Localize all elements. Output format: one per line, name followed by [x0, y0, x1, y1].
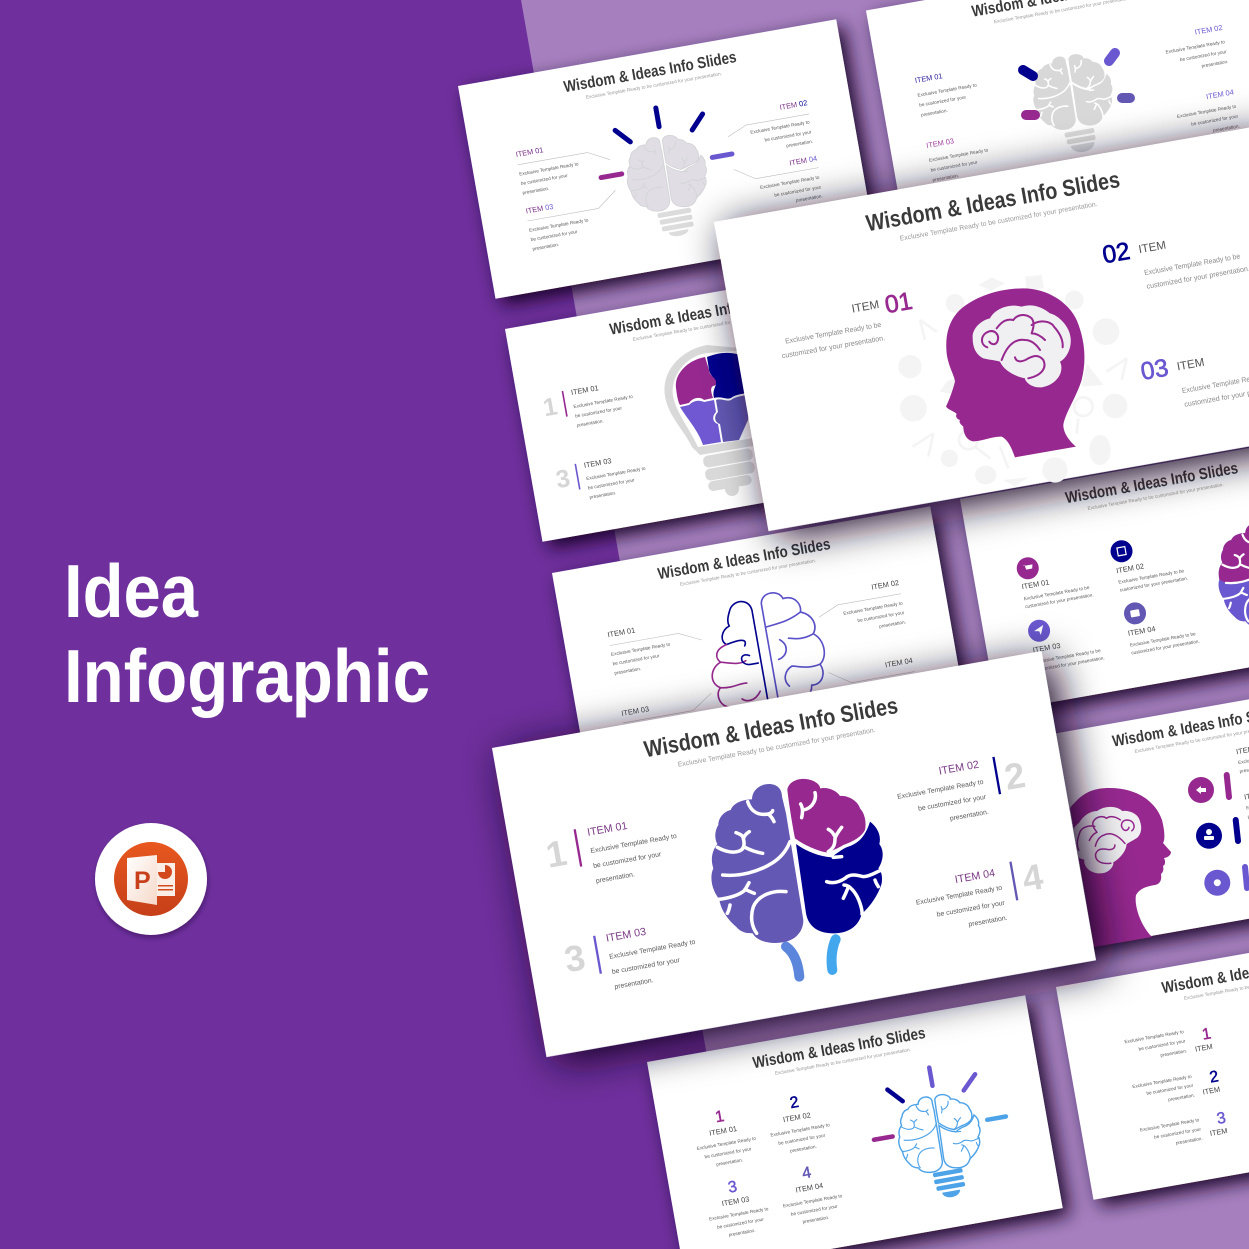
panel: blue bulb slide: presentation.	[728, 1228, 756, 1237]
panel: head with icon list slide	[1007, 675, 1249, 955]
panel: large head slide: Wisdom & Ideas Info Slides	[864, 166, 1122, 236]
panel: blue bulb slide: be customized for your	[778, 1133, 826, 1146]
panel: icon list slide: customized for your presentation.	[1036, 655, 1105, 672]
panel: gray brain slide with rays: Wisdom & Ideas Info Slides	[562, 49, 738, 96]
panel: gray brain slide with rays: ITEM 04	[789, 154, 818, 168]
icon: PowerPoint badge	[95, 823, 207, 935]
panel: numbered right slide: presentation.	[1175, 1136, 1203, 1146]
panel: gray brain slide with rays	[458, 19, 874, 299]
panel: large colour brain slide: Exclusive Template Ready to	[590, 833, 677, 855]
icon: four colour brain	[711, 779, 883, 977]
panel: blue bulb slide: be customized for your	[790, 1204, 838, 1217]
icon: puzzle light bulb	[664, 345, 772, 496]
icon: head silhouette facing right	[1062, 788, 1171, 947]
panel: outline brain slide	[552, 506, 968, 786]
panel: icon list slide: customized for your presentation.	[1131, 639, 1200, 656]
panel: puzzle bulb slide: 1	[541, 392, 560, 422]
panel: blue bulb slide: Exclusive Template Ready to	[709, 1206, 769, 1222]
panel: gray brain slide with rays: Exclusive Template Ready to	[750, 119, 810, 135]
panel: large colour brain slide: presentation.	[614, 977, 654, 991]
panel: puzzle bulb slide: be customized for your	[575, 405, 623, 419]
panel: icon list slide: Exclusive Template Ready to be	[1023, 585, 1090, 601]
panel: puzzle bulb slide: Exclusive Template Ready to	[573, 394, 634, 409]
panel: large colour brain slide: 1	[543, 832, 570, 876]
panel: large colour brain slide: Wisdom & Ideas Info Slides	[642, 692, 900, 762]
panel: numbered right slide: Exclusive Template Ready to	[1132, 1074, 1192, 1089]
panel: gray brain slide with rays: Exclusive Template Ready to	[519, 161, 579, 177]
panel: gray brain slide with stub bars: Exclusive Template Ready to	[1165, 39, 1226, 55]
panel: icon list slide: Exclusive Template Ready to be	[1118, 568, 1185, 585]
panel: gray brain slide with stub bars: be customized for your	[930, 159, 978, 173]
panel: gray brain slide with rays: Exclusive Template Ready to	[760, 175, 820, 190]
panel: outline brain slide: ITEM 01	[607, 626, 636, 639]
panel: outline brain slide: presentation.	[879, 619, 906, 629]
panel: outline brain slide: Wisdom & Ideas Info Slides	[656, 536, 832, 583]
panel: large colour brain slide: presentation.	[949, 809, 989, 823]
panel: icon list slide: Exclusive Template Ready to be	[1130, 631, 1196, 648]
panel: gray brain slide with stub bars: ITEM 03	[926, 136, 955, 150]
panel: icon list slide: ITEM 02	[1116, 562, 1145, 575]
panel: large colour brain slide: ITEM 04	[954, 867, 996, 886]
panel: gray brain slide with rays: be customized for your	[764, 129, 812, 143]
panel: numbered right slide: presentation.	[1160, 1048, 1187, 1058]
panel: blue bulb slide: 3	[727, 1178, 739, 1197]
panel: large colour brain slide: be customized for your	[918, 794, 987, 813]
panel: gray brain slide with stub bars: ITEM 01	[914, 71, 943, 85]
background: light purple band	[521, 0, 1249, 1249]
panel: large head slide: Exclusive Template Ready to be	[1143, 251, 1241, 277]
panel: outline brain slide: Exclusive Template Ready to be customized for your presentation.	[679, 558, 816, 588]
title	[64, 549, 430, 718]
panel: large colour brain slide: be customized for your	[593, 851, 663, 870]
panel: numbered right slide: be customized for your	[1146, 1083, 1194, 1096]
panel: large colour brain slide: be customized for your	[611, 957, 681, 976]
panel: puzzle bulb slide	[505, 262, 921, 542]
panel: outline brain slide: presentation.	[614, 666, 641, 676]
panel: numbered right slide: 1	[1201, 1025, 1213, 1044]
title: Idea	[64, 549, 199, 633]
panel: icon list slide	[960, 432, 1249, 712]
panel: outline brain slide: be customized for your	[857, 610, 905, 623]
panel: gray brain slide with stub bars: presentation.	[1201, 59, 1229, 69]
panel: icon list slide: Exclusive Template Ready to be	[1035, 648, 1101, 664]
panel: large colour brain slide: ITEM 03	[605, 926, 647, 945]
panel: large head slide: Exclusive Template Ready to be customized for your presentation.	[899, 201, 1098, 243]
panel: large colour brain slide: 3	[561, 936, 588, 980]
panel: gray brain slide with rays: Exclusive Template Ready to be customized for your presentation.	[585, 71, 722, 101]
panel: large head slide: 03	[1139, 355, 1171, 386]
panel: puzzle bulb slide: Wisdom & Ideas Info Slides	[608, 292, 784, 339]
panel: blue bulb slide: Exclusive Template Ready to be customized for your presentation.	[774, 1047, 911, 1077]
panel: blue bulb slide: presentation.	[790, 1144, 817, 1153]
panel: puzzle bulb slide: Exclusive Template Ready to be customized for your presentation.	[632, 313, 769, 343]
panel: blue bulb slide: 2	[789, 1094, 800, 1112]
panel: blue bulb slide	[647, 995, 1063, 1249]
panel: gray brain slide with stub bars	[866, 0, 1249, 223]
panel: blue bulb slide: Exclusive Template Ready to	[770, 1122, 831, 1138]
panel: numbered right slide: be customized for your	[1138, 1038, 1186, 1052]
panel: blue bulb slide: be customized for your	[704, 1146, 752, 1159]
panel: large colour brain slide: ITEM 02	[938, 759, 980, 778]
icon: head silhouette with brain	[946, 288, 1084, 457]
panel: blue bulb slide: be customized for your	[717, 1217, 765, 1230]
panel: icon list slide: customized for your presentation.	[1119, 576, 1188, 593]
panel: outline brain slide: ITEM 03	[621, 704, 650, 718]
panel: blue bulb slide: ITEM 03	[721, 1194, 750, 1208]
panel: icon list slide: ITEM 04	[1127, 624, 1156, 638]
panel: large colour brain slide: Exclusive Template Ready to	[897, 779, 984, 801]
panel: outline brain slide: Exclusive Template Ready to	[625, 720, 685, 736]
panel: puzzle bulb slide: presentation.	[589, 490, 617, 500]
panel: outline brain slide: be customized for your	[612, 653, 660, 666]
panel: puzzle bulb slide: be customized for your	[587, 477, 635, 490]
decorative icon field around head	[898, 275, 1127, 487]
panel: gray brain slide with stub bars: be customized for your	[919, 94, 967, 108]
panel: puzzle bulb slide: Exclusive Template Ready to	[586, 466, 646, 481]
panel: numbered right slide: Exclusive Template Ready to	[1124, 1029, 1184, 1044]
panel: large head slide: ITEM	[851, 298, 880, 316]
panel: numbered right slide: ITEM	[1194, 1042, 1213, 1054]
panel: blue bulb slide: 1	[714, 1108, 726, 1126]
panel: large colour brain slide: be customized for your	[936, 900, 1006, 919]
panel: large head slide: Exclusive Template Ready to be	[784, 320, 882, 346]
panel: numbered right slide: presentation.	[1168, 1093, 1195, 1102]
panel: gray brain slide with rays: presentation.	[522, 186, 550, 195]
panel: gray brain slide with rays: be customized for your	[520, 173, 568, 186]
panel: blue bulb slide: ITEM 01	[709, 1124, 738, 1138]
panel: outline brain slide: Exclusive Template Ready to	[857, 679, 917, 695]
panel: gray brain slide with stub bars: presentation.	[932, 173, 960, 182]
icon: PowerPoint badge: P	[134, 867, 151, 895]
panel: gray brain slide with stub bars: Exclusive Template Ready to	[1177, 104, 1237, 119]
panel: gray brain slide with rays: ITEM 01	[515, 145, 544, 159]
panel: gray brain slide with stub bars: be customized for your	[1179, 49, 1227, 62]
icon: outline brain	[700, 586, 833, 721]
title: Infographic	[64, 634, 430, 718]
panel: large colour brain slide: ITEM 01	[586, 820, 628, 839]
panel: gray brain slide with stub bars: ITEM 04	[1205, 87, 1234, 101]
panel: outline brain slide: Exclusive Template Ready to	[611, 642, 671, 657]
panel: large head slide: 01	[883, 288, 915, 319]
panel: blue bulb slide: Wisdom & Ideas Info Slides	[751, 1025, 927, 1072]
panel: icon list slide: Exclusive Template Ready to be customized for your presentation.	[1087, 482, 1224, 512]
panel: gray brain slide with rays: ITEM 03	[525, 202, 554, 216]
panel: gray brain slide with rays: ITEM 02	[779, 98, 808, 112]
panel: icon list slide: customized for your presentation.	[1025, 592, 1094, 609]
panel: outline brain slide: ITEM 02	[871, 578, 900, 592]
panel: gray brain slide with rays: presentation.	[786, 139, 813, 148]
panel: large head slide: customized for your presentation.	[781, 333, 886, 360]
panel: large head slide: ITEM	[1176, 356, 1205, 373]
panel: numbered right slide: 2	[1208, 1068, 1220, 1087]
panel: blue bulb slide: presentation.	[802, 1215, 830, 1224]
icons: round list markers	[1188, 775, 1247, 896]
panel: numbered right slide: 3	[1216, 1110, 1227, 1128]
icon: partial colour brain	[1219, 523, 1249, 628]
panel: gray brain slide with rays: be customized for your	[530, 229, 578, 242]
panel: blue bulb slide: ITEM 04	[795, 1181, 824, 1195]
panel: gray brain slide with stub bars: be customized for your	[1191, 113, 1239, 127]
panel: gray brain slide with rays: presentation.	[795, 193, 823, 203]
panel: numbered right slide: Exclusive Template Ready to	[1140, 1117, 1200, 1133]
panel: numbered right slide	[1056, 920, 1249, 1200]
panel: blue bulb slide: presentation.	[716, 1157, 743, 1167]
panel: gray brain slide with rays: Exclusive Template Ready to	[529, 217, 589, 233]
panel: gray brain slide with rays: presentation.	[532, 242, 560, 252]
panel: gray brain slide with stub bars: ITEM 02	[1194, 23, 1223, 37]
panel: large head slide: ITEM	[1138, 239, 1167, 256]
panel: large head slide: 02	[1101, 238, 1132, 269]
panel: numbered right slide: ITEM	[1202, 1085, 1221, 1097]
panel: large colour brain slide: 4	[1019, 856, 1046, 899]
panel: large colour brain slide: Exclusive Template Ready to	[915, 885, 1003, 907]
panel: icon list slide: ITEM 03	[1032, 641, 1061, 655]
panel: blue bulb slide: Exclusive Template Ready to	[783, 1193, 843, 1209]
panel: large colour brain slide: Exclusive Template Ready to be customized for your presentation.	[677, 727, 876, 769]
panel: puzzle bulb slide: 3	[554, 464, 572, 494]
panel: puzzle bulb slide: ITEM 03	[583, 456, 612, 470]
panel: gray brain slide with stub bars: presentation.	[1213, 123, 1240, 133]
panel: large colour brain slide: Exclusive Template Ready to	[609, 939, 696, 961]
panel: numbered right slide: ITEM	[1209, 1126, 1228, 1138]
panel: outline brain slide: Exclusive Template Ready to	[843, 601, 903, 616]
panel: gray brain slide with stub bars: presentation.	[921, 108, 948, 118]
panel: puzzle bulb slide: ITEM 01	[570, 383, 599, 397]
panel: outline brain slide: ITEM 04	[884, 656, 913, 669]
panel: gray brain slide with stub bars: Exclusive Template Ready to	[929, 147, 989, 163]
panel: large head slide	[714, 125, 1249, 531]
panel: gray brain slide with rays: be customized for your	[774, 184, 822, 198]
panel: large colour brain slide: presentation.	[595, 871, 635, 885]
panel: blue bulb slide: ITEM 02	[782, 1110, 811, 1124]
panel: large colour brain slide: 2	[1001, 754, 1028, 798]
panel: blue bulb slide: 4	[801, 1164, 813, 1183]
panel: numbered right slide: be customized for your	[1154, 1126, 1202, 1140]
panel: blue bulb slide: Exclusive Template Ready to	[696, 1136, 757, 1151]
panel: icon list slide: ITEM 01	[1021, 578, 1050, 591]
panel: gray brain slide with stub bars: Exclusive Template Ready to	[917, 82, 978, 98]
panel: large colour brain slide: presentation.	[968, 915, 1008, 929]
panel: puzzle bulb slide: presentation.	[576, 418, 604, 428]
panel: large colour brain slide	[492, 651, 1096, 1057]
